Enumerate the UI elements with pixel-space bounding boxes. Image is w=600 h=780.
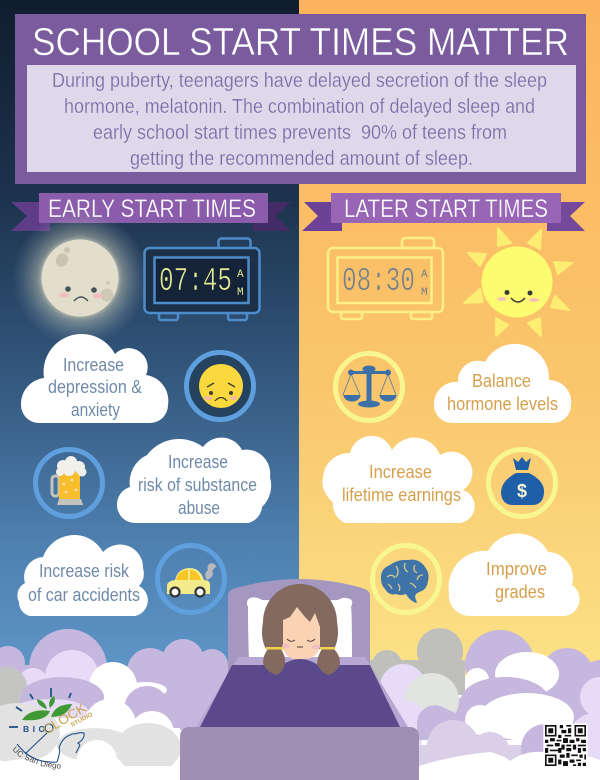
intro text: early school start times prevents 90% of teens from xyxy=(93,122,507,144)
pillow xyxy=(247,597,352,663)
logo: Bio Clock Studio UC San Diego: Diego xyxy=(40,759,62,771)
face xyxy=(283,607,320,659)
icon: alarm clock 07:45: 07:45 xyxy=(159,263,232,300)
logo: Bio Clock Studio UC San Diego: BIO xyxy=(23,724,49,734)
icon: money bag: $ xyxy=(517,481,527,501)
cloud: increase depression and anxiety: anxiety xyxy=(71,400,120,420)
intro text: hormone, melatonin. The combination of delayed sleep and xyxy=(64,96,535,118)
icon: alarm clock 08:30: M xyxy=(421,287,428,299)
icon: alarm clock 07:45 xyxy=(144,238,260,320)
pigtails xyxy=(263,649,340,675)
cloud: improve grades xyxy=(449,533,580,616)
logo: Bio Clock Studio UC San Diego: UC xyxy=(11,745,25,759)
headboard xyxy=(228,579,370,680)
cloud: balance hormone levels xyxy=(434,344,571,423)
ribbon: early start times xyxy=(11,193,291,231)
cloud: increase risk of car accidents: Increase risk xyxy=(39,561,130,581)
cloud: increase lifetime earnings: Increase xyxy=(369,462,432,482)
intro text xyxy=(52,70,547,170)
icon: alarm clock 07:45: A xyxy=(237,269,244,281)
cloud: improve grades: Improve xyxy=(486,559,547,579)
sheet xyxy=(196,657,408,727)
logo: Bio Clock Studio UC San Diego xyxy=(9,688,94,771)
cloud: increase depression and anxiety xyxy=(21,334,168,423)
cloud: increase lifetime earnings: lifetime earnings xyxy=(342,485,461,505)
icon: alarm clock 08:30 xyxy=(328,238,443,319)
icon: sad moon xyxy=(12,210,148,346)
icon: alarm clock 08:30: 08:30 xyxy=(342,263,415,300)
cloud: increase risk of substance abuse: abuse xyxy=(178,498,220,518)
icon: money bag xyxy=(488,450,556,516)
cloudscape: left xyxy=(0,629,300,780)
logo: Bio Clock Studio UC San Diego: STUDIO xyxy=(70,712,94,729)
cloud: increase risk of car accidents xyxy=(17,535,148,616)
icon: smoking car xyxy=(158,546,224,612)
icon: brain xyxy=(372,546,440,612)
intro text: During puberty, teenagers have delayed secretion of the sleep xyxy=(52,70,547,92)
intro text: getting the recommended amount of sleep. xyxy=(130,148,473,170)
ribbon: later start times: LATER START TIMES xyxy=(344,195,548,223)
bed foot xyxy=(180,727,419,780)
logo: Bio Clock Studio UC San Diego: San xyxy=(23,753,40,766)
cloud: increase depression and anxiety: depression & xyxy=(48,377,142,397)
cloud: increase risk of substance abuse: Increase xyxy=(168,452,228,472)
cloudscape: right xyxy=(370,628,600,780)
blanket xyxy=(200,659,400,727)
background: warm later-morning side xyxy=(299,0,600,680)
icon: sad face xyxy=(186,352,254,420)
icon: balance scale xyxy=(336,354,402,420)
cloud: increase risk of car accidents: of car accidents xyxy=(28,585,140,605)
icon: beer mug xyxy=(36,450,102,516)
cloud: balance hormone levels: Balance xyxy=(472,371,531,391)
ribbon: later start times xyxy=(302,193,585,231)
hair ties xyxy=(266,647,335,650)
icon: alarm clock 07:45: M xyxy=(237,287,244,299)
illustration: girl asleep in bed xyxy=(180,579,419,780)
cloud: improve grades: grades xyxy=(495,582,545,602)
cloud: increase depression and anxiety: Increase xyxy=(63,355,124,375)
closed eyes, mouth, cheeks xyxy=(282,639,320,649)
icon: smiling sun xyxy=(464,228,572,336)
cloud: increase lifetime earnings xyxy=(322,436,475,523)
header panel xyxy=(15,14,586,184)
cloud: balance hormone levels: hormone levels xyxy=(447,394,558,414)
background: dark early-morning side xyxy=(0,0,299,680)
logo: Bio Clock Studio UC San Diego: CLOCK xyxy=(40,700,89,738)
hair back xyxy=(262,584,338,649)
icon: alarm clock 08:30: A xyxy=(421,269,428,281)
QR code xyxy=(543,723,588,768)
cloud: increase risk of substance abuse: risk of substance xyxy=(138,475,257,495)
ribbon: early start times: EARLY START TIMES xyxy=(48,195,256,223)
cloud: increase risk of substance abuse xyxy=(117,438,271,523)
